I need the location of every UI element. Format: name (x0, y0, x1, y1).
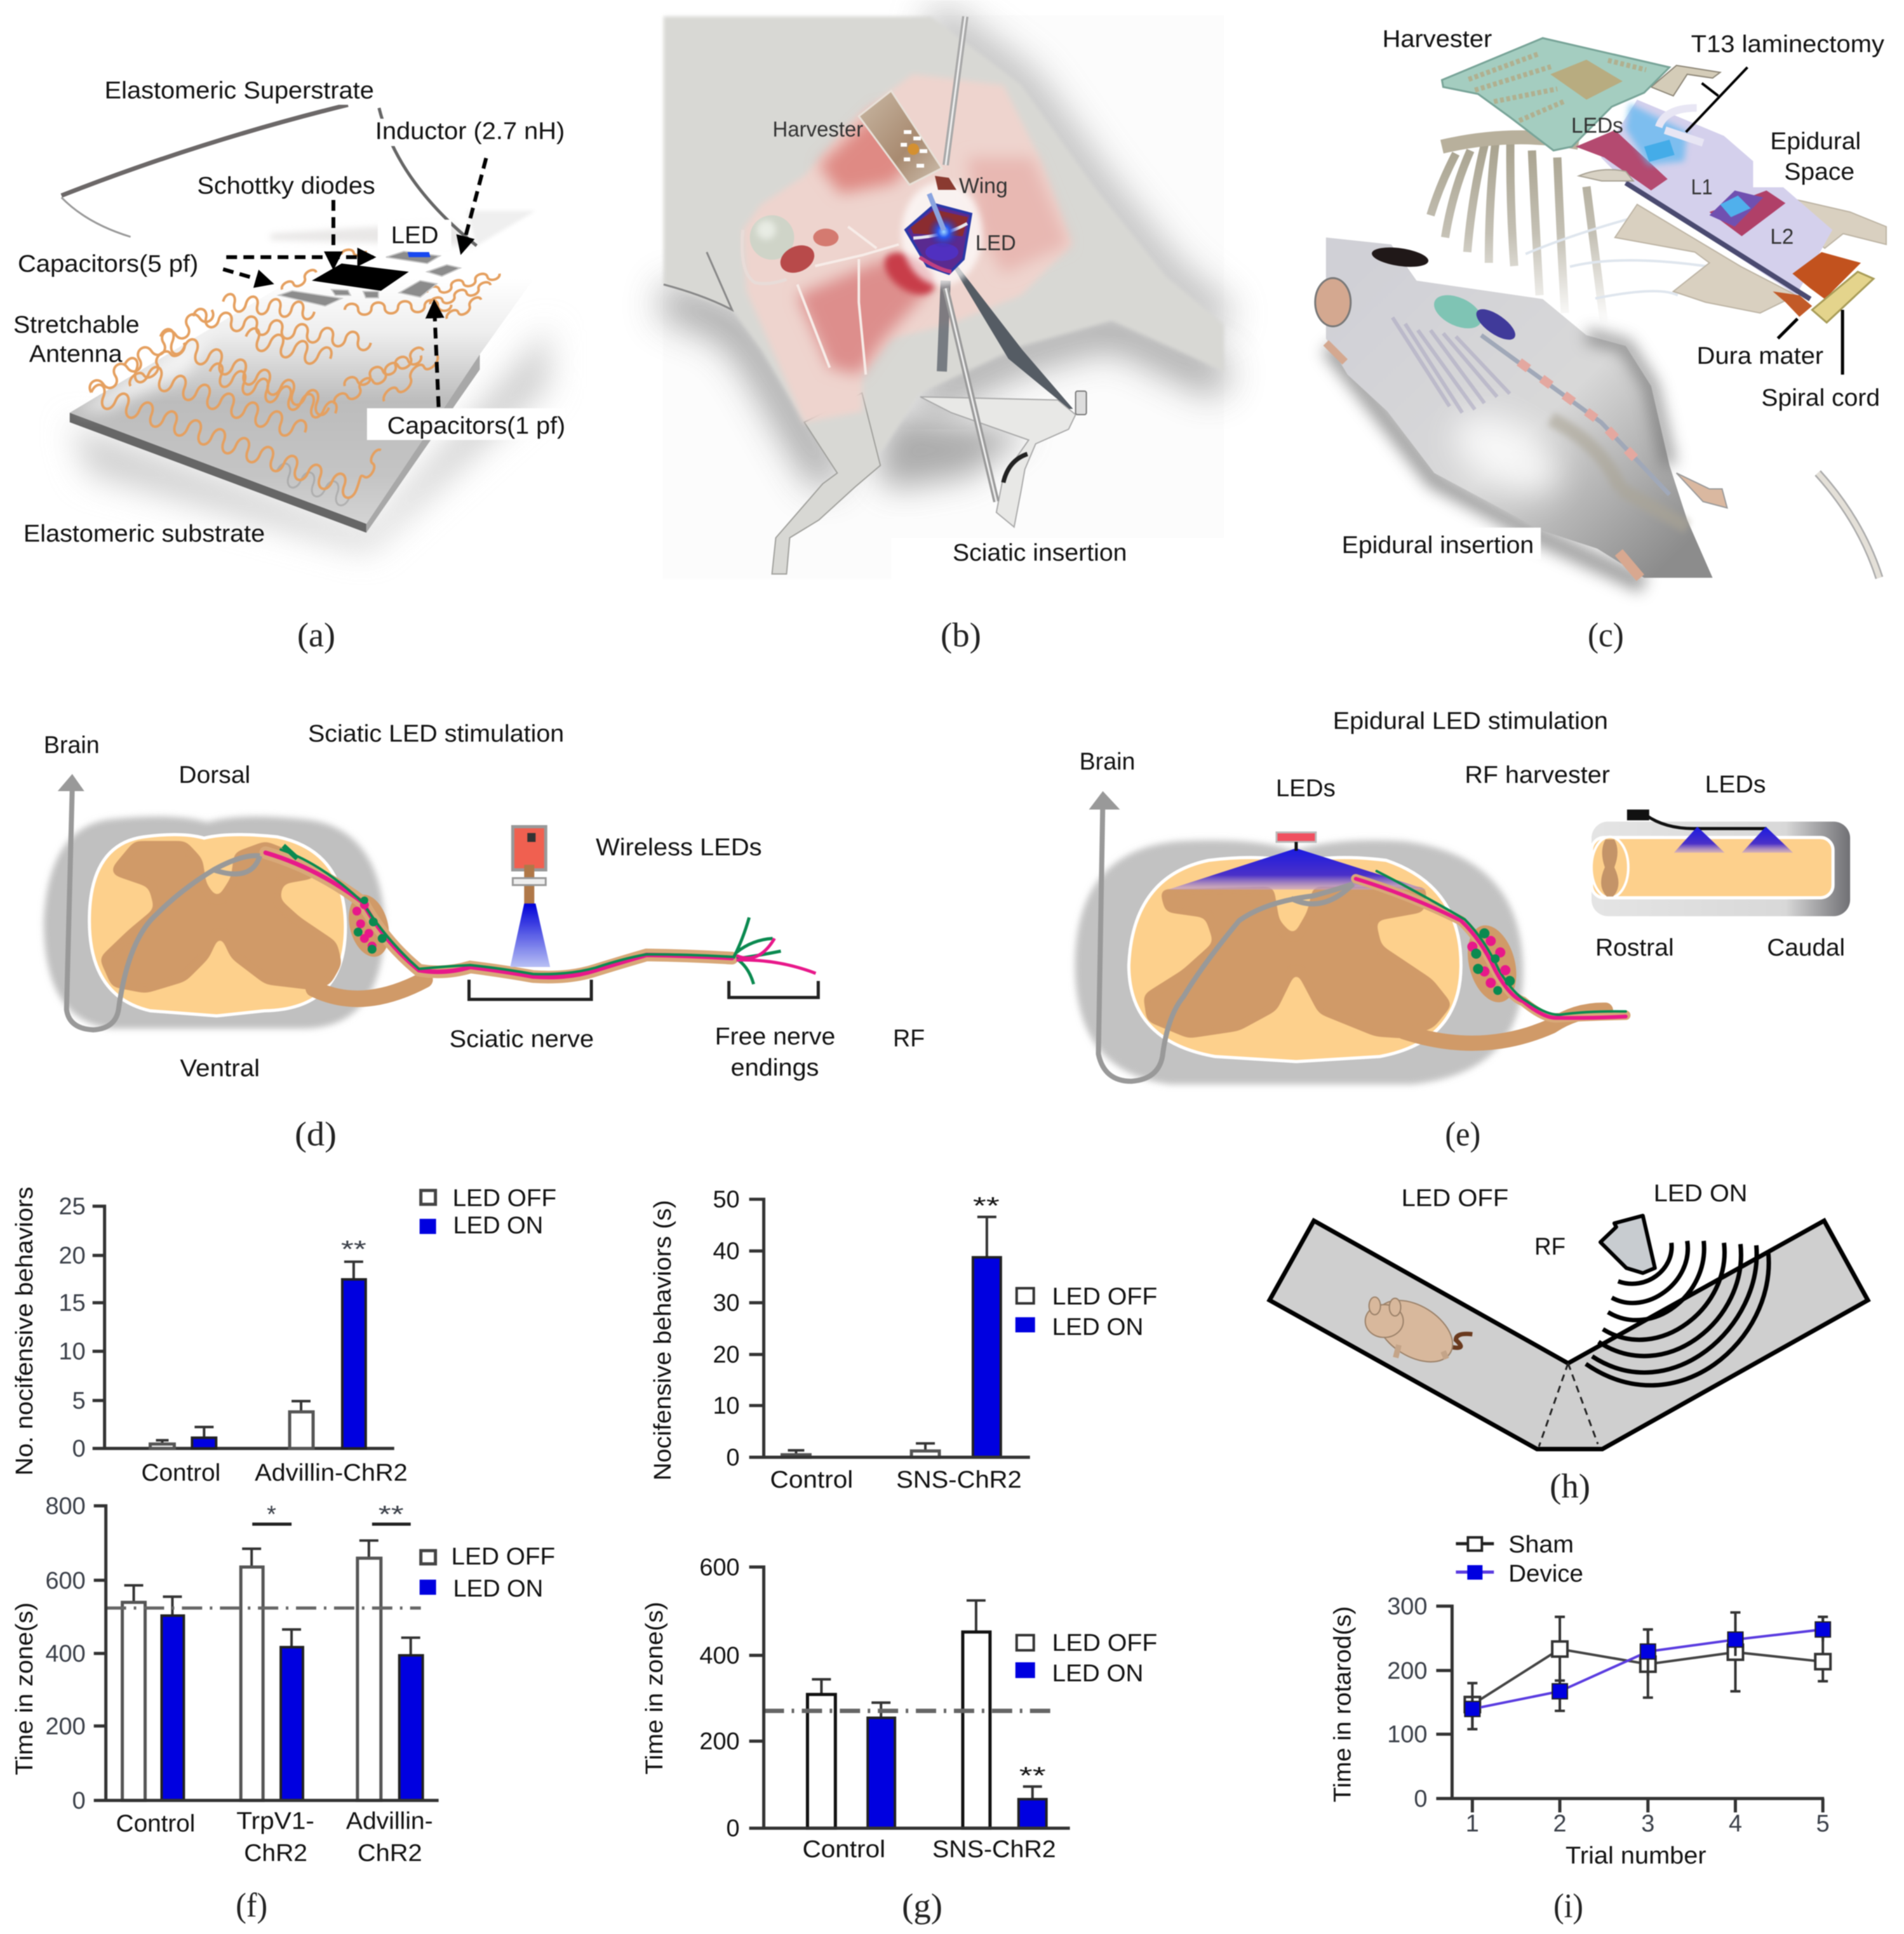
spinal cord grey surround (44, 817, 385, 1029)
elastomeric substrate plate (70, 272, 532, 533)
icon: RF antenna emitter (1600, 1216, 1655, 1273)
error bars (812, 1601, 1042, 1799)
tick labels: 200 (45, 1713, 86, 1740)
dark red spot (876, 244, 942, 303)
legend (420, 1544, 555, 1603)
labels for panel a: Elastomeric Superstrate (105, 77, 374, 104)
label background: elastomeric superstrate (103, 79, 375, 105)
category labels: Control (116, 1810, 195, 1837)
LED glow upper (1626, 103, 1687, 165)
spine lavender column (1601, 100, 1832, 295)
labels for panel b: Harvester (773, 117, 863, 142)
rat tail segment (1818, 473, 1879, 578)
panel g top: nocifensive behaviors seconds bar chart (650, 1187, 1157, 1493)
organ small (813, 229, 838, 246)
tick labels: 30 (713, 1290, 740, 1317)
labels for panel d (44, 721, 925, 1082)
nerve root (314, 980, 425, 999)
spinal cord grey surround (1075, 840, 1523, 1084)
arrow: inductor (462, 158, 486, 252)
upper spine bone (1442, 137, 1579, 147)
blue light cone (1168, 848, 1426, 890)
category labels: Advillin- (346, 1808, 433, 1834)
ganglion (342, 890, 396, 961)
y axis label: Time in rotarod(s) (1330, 1606, 1357, 1803)
dorsal horn terminals (283, 846, 297, 858)
crimson tissue lower (1710, 190, 1785, 236)
tick labels: 15 (59, 1290, 86, 1317)
plate highlight left (74, 328, 213, 411)
right pink muscle (967, 157, 1069, 274)
white label box: epidural space (1753, 128, 1889, 187)
crimson tissue upper (1576, 130, 1668, 190)
labels for panel c: T13 laminectomy (1691, 31, 1884, 58)
panel h: place preference Y maze (1270, 1180, 1868, 1505)
sham series (1465, 1613, 1830, 1729)
device series (1465, 1617, 1830, 1729)
pink spinal segments (1519, 362, 1646, 470)
error bars (156, 1262, 363, 1444)
maze centre divider (1539, 1363, 1598, 1446)
upper red muscle (819, 107, 913, 194)
legend (1016, 1630, 1157, 1687)
y tick labels: 0 (1414, 1786, 1427, 1813)
labels for panel c: L1 (1691, 175, 1713, 199)
arrow: capacitors 5 pf upper (226, 255, 373, 259)
tick labels: 5 (72, 1388, 86, 1415)
labels for panel a: Capacitors(1 pf) (387, 413, 565, 439)
ascending axon and arrow to brain (58, 774, 260, 1030)
foot slit (1003, 454, 1028, 483)
legend: LED ON (453, 1213, 543, 1239)
LED square upper (1644, 140, 1675, 162)
tick labels: 400 (699, 1643, 740, 1669)
label background: capacitors 1 pf (367, 408, 565, 440)
x tick labels: 5 (1816, 1810, 1830, 1837)
y tick labels: 300 (1387, 1594, 1427, 1620)
labels for panel d: Brain (44, 732, 100, 759)
labels for panel d: Free nerve (715, 1024, 835, 1050)
labels for panel a: Stretchable (13, 312, 140, 338)
labels for panel h: LED ON (1654, 1180, 1747, 1207)
forceps tab (1076, 391, 1087, 415)
error bars (788, 1217, 996, 1455)
elastomeric superstrate sheet (62, 105, 535, 246)
category labels: ChR2 (358, 1840, 422, 1867)
panel f bottom: time in zone bar chart (11, 1493, 555, 1924)
panel b: sciatic insertion illustration (663, 15, 1224, 654)
labels for panel a: Capacitors(5 pf) (18, 251, 198, 277)
spine lower edge (1626, 183, 1810, 299)
nerve strands (797, 227, 899, 375)
tick labels: 200 (699, 1728, 740, 1755)
labels for panel b: Sciatic insertion (953, 540, 1127, 566)
arrow: capacitors 1 pf (434, 302, 439, 407)
legend: Device (1508, 1561, 1583, 1587)
harvester (859, 91, 942, 185)
laminectomy hook (1651, 65, 1720, 96)
bracket: sciatic nerve (469, 980, 591, 999)
rat rear foot (1619, 552, 1640, 578)
legend (420, 1185, 556, 1239)
labels for panel c: Dura mater (1697, 343, 1824, 370)
tick labels: 0 (727, 1444, 740, 1471)
axes (93, 1206, 394, 1448)
arrow: capacitors 5 pf lower (223, 269, 271, 283)
small harvester on rat (1429, 288, 1487, 335)
significance bar 2: ** (379, 1502, 404, 1528)
tick labels: 0 (727, 1815, 740, 1842)
category labels: TrpV1- (236, 1808, 314, 1834)
legend: LED OFF (453, 1185, 556, 1212)
legend: LED OFF (1052, 1284, 1157, 1310)
legend: LED ON (1052, 1660, 1143, 1687)
tick labels: 800 (45, 1493, 86, 1520)
labels for panel d: Wireless LEDs (596, 834, 762, 861)
reference dash-dot line (106, 1606, 421, 1610)
faint nerve strands (1525, 216, 1710, 298)
significance bar 1: * (267, 1502, 276, 1528)
bars (123, 1558, 423, 1801)
lower vertebra process (1615, 204, 1796, 313)
lower red muscle (797, 259, 927, 375)
category labels: Control (802, 1836, 885, 1863)
caption c: (c) (1588, 616, 1624, 654)
caption g: (g) (902, 1887, 942, 1924)
tick labels: 600 (699, 1554, 740, 1581)
white matter (90, 834, 345, 1016)
ghost traces under plate (277, 463, 349, 505)
RF harvester chip with wire (1627, 810, 1766, 829)
bars (151, 1279, 366, 1448)
caption i: (i) (1553, 1887, 1583, 1924)
y axis label: No. nocifensive behaviors (11, 1187, 38, 1476)
caption b: (b) (941, 616, 981, 654)
labels for panel e: Caudal (1767, 935, 1845, 961)
implant shank shadow (942, 281, 946, 371)
tick labels: 600 (45, 1568, 86, 1594)
wing tab (935, 176, 956, 190)
LED cone 2 (1741, 827, 1793, 853)
labels for panel c: Harvester (1383, 26, 1492, 53)
significance stars: ** (341, 1236, 366, 1263)
caption h: (h) (1550, 1467, 1590, 1505)
maze (1270, 1221, 1868, 1449)
category labels: Control (142, 1460, 220, 1486)
labels for panel a: Inductor (2.7 nH) (375, 118, 565, 145)
RF wave arcs (1586, 1241, 1769, 1385)
labels for panel e (1080, 708, 1845, 961)
rat highlight (1442, 399, 1572, 510)
sciatic nerve fibres (265, 850, 732, 977)
vertebra knob (1579, 170, 1633, 181)
small spine window (1472, 303, 1520, 345)
rat back shading (1586, 335, 1670, 465)
tick labels: 0 (72, 1788, 86, 1815)
label background: sciatic insertion (891, 538, 1224, 579)
labels for panel a: Schottky diodes (197, 173, 375, 199)
icon: mouse (1365, 1288, 1472, 1375)
category labels: ChR2 (244, 1840, 307, 1867)
labels for panel a: LED (391, 222, 439, 249)
rat nose (1371, 244, 1430, 270)
rat right foot (1677, 473, 1727, 508)
hip joint (742, 215, 794, 284)
x tick labels: 2 (1553, 1810, 1567, 1837)
transparent ribs (1393, 317, 1510, 413)
labels for panel e: Rostral (1595, 935, 1674, 961)
category labels (142, 1460, 408, 1486)
arrow: schottky diodes (332, 200, 335, 267)
afferent nerve fibres (1356, 871, 1626, 1018)
label background: schottky diodes (196, 174, 384, 199)
purple window lower (1710, 190, 1763, 227)
category labels: SNS-ChR2 (932, 1836, 1056, 1863)
tick labels: 50 (713, 1187, 740, 1213)
rat rump bones (1551, 419, 1687, 527)
reference dash-dot line (764, 1709, 1056, 1713)
panel c: epidural insertion illustration (1315, 26, 1889, 654)
device shadow (72, 328, 549, 550)
caption d: (d) (295, 1115, 337, 1153)
LED (408, 252, 431, 257)
wireless LED device (513, 827, 546, 904)
tick labels (713, 1187, 740, 1471)
labels for panel h (1402, 1180, 1747, 1260)
muscle tissue base (743, 74, 1072, 422)
category labels (802, 1836, 1056, 1863)
y axis label: Time in zone(s) (11, 1603, 38, 1775)
x tick labels (1466, 1810, 1830, 1837)
y tick labels: 100 (1387, 1721, 1427, 1748)
labels for panel c: LEDs (1571, 114, 1623, 138)
caption e: (e) (1445, 1115, 1480, 1153)
panel g bottom: time in zone bar chart (641, 1554, 1157, 1924)
category labels (770, 1467, 1022, 1493)
tick labels (699, 1554, 740, 1842)
legend: LED OFF (452, 1544, 555, 1570)
ganglion (1460, 920, 1524, 1008)
legend (1016, 1284, 1157, 1340)
dura flap (1773, 291, 1812, 317)
grey matter butterfly (100, 841, 342, 993)
left ground shadow (664, 298, 831, 483)
labels for panel c: Spiral cord (1761, 385, 1880, 411)
tick labels: 20 (59, 1243, 86, 1269)
under-leg shadow (875, 413, 1029, 489)
leader line: dura mater (1778, 319, 1797, 338)
x axis label: Trial number (1565, 1843, 1706, 1869)
labels for panel e: Brain (1080, 749, 1135, 775)
significance bar 2 (372, 1502, 411, 1528)
labels for panel b: LED (975, 231, 1016, 255)
category labels (116, 1808, 433, 1867)
tick labels: 10 (59, 1338, 86, 1365)
cylinder inset: longitudinal view (1592, 822, 1850, 916)
leader line: T13 (1686, 67, 1747, 132)
upper vertebra process (1752, 190, 1886, 248)
LED square lower (1720, 196, 1750, 217)
ganglion neurons (352, 897, 387, 954)
labels for panel e: Epidural LED stimulation (1333, 708, 1608, 735)
error bars (124, 1540, 420, 1655)
tick labels: 25 (59, 1194, 86, 1220)
harvester teal sheet (1442, 38, 1670, 150)
labels for panel h: RF (1534, 1234, 1565, 1260)
laminectomy bar (1659, 108, 1703, 143)
capacitors (279, 251, 460, 306)
tick labels: 10 (713, 1393, 740, 1420)
label background: epidural insertion (1336, 528, 1541, 559)
caption a: (a) (297, 616, 335, 654)
rat left hand (1326, 343, 1345, 362)
y axis label: Time in zone(s) (641, 1602, 668, 1775)
free nerve endings (734, 917, 815, 984)
hind leg (772, 393, 880, 574)
labels for panel c: L2 (1770, 225, 1793, 249)
white background (663, 15, 1224, 579)
surgical cavity with LED glow (901, 182, 982, 286)
dura mater orange (1792, 252, 1861, 299)
panel f top: nocifensive behaviors bar chart (11, 1185, 556, 1486)
category labels: Advillin-ChR2 (255, 1460, 408, 1486)
body dark edge line (664, 252, 732, 310)
labels for panel e: LEDs (1705, 771, 1766, 798)
tick labels: 0 (72, 1436, 86, 1462)
axes (1436, 1606, 1824, 1813)
body outline shadow (931, 17, 1224, 324)
category labels: Control (770, 1467, 853, 1493)
legend: LED ON (1052, 1314, 1143, 1340)
lower needle (946, 288, 996, 502)
label background: LED (378, 220, 452, 250)
organ large (776, 240, 819, 278)
caption f: (f) (236, 1886, 267, 1924)
legend: LED ON (453, 1576, 543, 1603)
labels for panel d: endings (731, 1055, 819, 1081)
labels for panel h: LED OFF (1402, 1185, 1508, 1212)
labels for panel d: Sciatic nerve (450, 1026, 594, 1053)
y tick labels: 200 (1387, 1658, 1427, 1684)
epidural LED (1277, 832, 1316, 851)
axes (749, 1567, 1070, 1828)
labels for panel d: Ventral (180, 1055, 260, 1082)
significance bar 1 (252, 1502, 292, 1528)
labels for panel e: LEDs (1276, 775, 1336, 802)
labels for panel c (1342, 26, 1884, 559)
tick labels: 20 (713, 1342, 740, 1368)
y tick labels (1387, 1594, 1427, 1813)
stretchable antenna serpentine traces (90, 250, 500, 498)
significance stars: ** (1019, 1763, 1046, 1789)
nerve root (1404, 1010, 1606, 1043)
label background: inductor (372, 119, 565, 146)
bars (807, 1632, 1047, 1828)
x tick labels: 1 (1466, 1810, 1479, 1837)
labels for panel c: Epidural (1770, 128, 1861, 155)
axes (749, 1199, 1030, 1457)
panel d: sciatic LED stimulation diagram (44, 721, 925, 1153)
LED cone 1 (1674, 827, 1725, 853)
tick labels (45, 1493, 86, 1815)
legend: Sham (1508, 1531, 1574, 1558)
rat body (664, 17, 1224, 465)
tick labels (59, 1194, 86, 1462)
labels for panel b: Wing (959, 174, 1008, 198)
rat ground shadow (1329, 346, 1644, 584)
x tick labels: 3 (1641, 1810, 1654, 1837)
labels for panel d: Dorsal (178, 762, 250, 789)
cushion shadow (920, 327, 1224, 400)
labels for panel a (13, 77, 565, 547)
labels for panel d: Sciatic LED stimulation (308, 721, 564, 747)
panel i: rotarod line chart (1330, 1531, 1830, 1924)
category labels: SNS-ChR2 (896, 1467, 1022, 1493)
leader line: spiral cord (1841, 310, 1844, 375)
labels for panel c: Space (1784, 159, 1854, 185)
x tick labels: 4 (1729, 1810, 1742, 1837)
bracket: free nerve endings (729, 981, 818, 997)
tick labels: 400 (45, 1641, 86, 1667)
ganglion neurons (1467, 928, 1515, 995)
labels for panel c: Epidural insertion (1342, 532, 1534, 559)
lower charts group (11, 1180, 1868, 1924)
upper needle (946, 17, 965, 165)
transparent spine (1481, 335, 1670, 495)
grey matter butterfly (1143, 887, 1452, 1038)
rat body (1326, 237, 1713, 578)
legend (1456, 1531, 1583, 1587)
labels for panel e: RF harvester (1465, 762, 1610, 789)
y axis label: Nocifensive behaviors (s) (650, 1200, 676, 1481)
panel e: epidural LED stimulation diagram (1075, 708, 1850, 1153)
white matter (1129, 858, 1461, 1062)
right leg and foot (920, 397, 1076, 527)
significance stars: ** (973, 1193, 1000, 1220)
spinal cord end (1812, 272, 1874, 323)
legend: LED OFF (1052, 1630, 1157, 1657)
schottky diode chip (312, 263, 409, 291)
labels for panel b (773, 117, 1127, 566)
rat ear (1315, 278, 1351, 326)
labels for panel a: Antenna (29, 341, 123, 368)
tick labels: 40 (713, 1238, 740, 1265)
labels for panel a: Elastomeric substrate (23, 521, 265, 547)
axes (94, 1506, 439, 1801)
forceps (953, 266, 1073, 409)
ascending axon and arrow to brain (1089, 791, 1353, 1081)
panel a: stretchable antenna device (13, 77, 565, 654)
rib cage (1430, 140, 1604, 324)
bars (782, 1257, 1001, 1457)
labels for panel d: RF (893, 1025, 925, 1052)
LED light beam (510, 904, 550, 967)
